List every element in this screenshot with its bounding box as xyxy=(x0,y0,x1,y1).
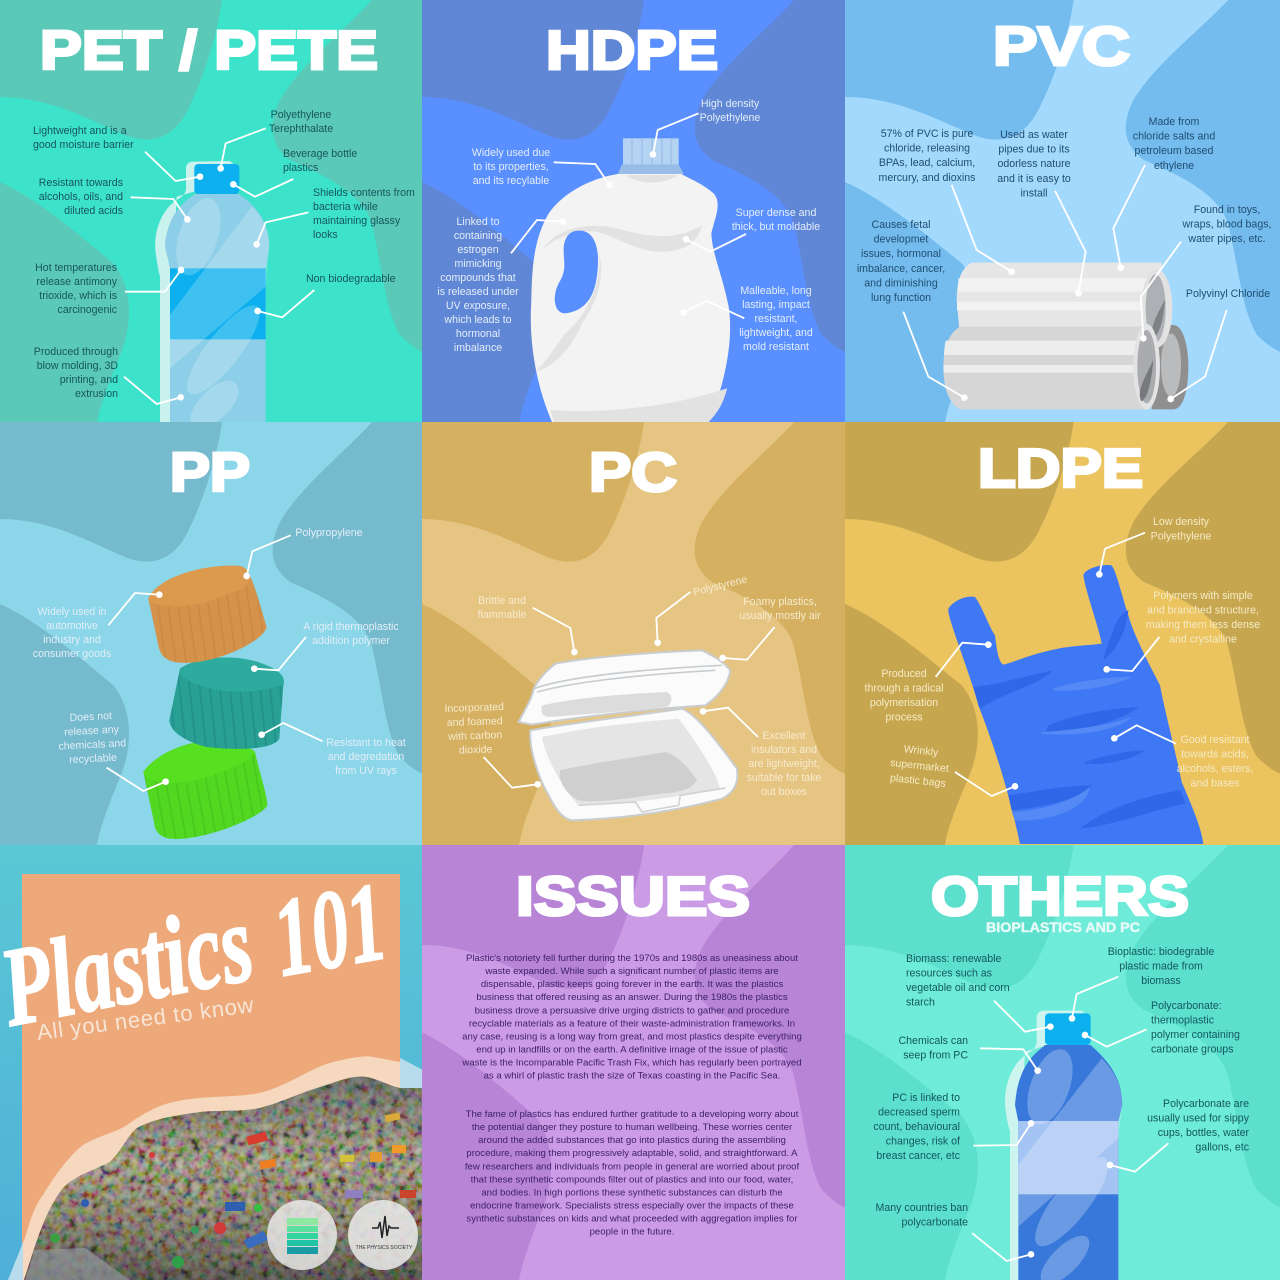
text block: paragraph 1: business drove a persuasive drive urging districts to gather and procedure xyxy=(475,1005,789,1016)
callout: incorporated and foamed: and foamed xyxy=(447,715,503,729)
callout: polycarbonate uses: gallons, etc xyxy=(1195,1142,1250,1154)
callout: produced through radical: polymerisation xyxy=(870,697,938,709)
callout: hot temperatures xyxy=(35,262,184,316)
callout: widely used: to its properties, xyxy=(473,161,549,173)
text block: paragraph 2: around the added substances that go into plastics during the assembling xyxy=(478,1135,786,1146)
callout: excellent insulators xyxy=(700,708,821,798)
callout: does not release: release any xyxy=(64,724,120,738)
callout: foamy plastics: Foamy plastics, xyxy=(743,596,817,608)
callout: fetal development: imbalance, cancer, xyxy=(857,263,945,275)
text block: paragraph 2: people in the future. xyxy=(590,1227,674,1238)
callout: 57% of PVC: mercury, and dioxins xyxy=(879,172,975,184)
title: PVC: PVC xyxy=(993,15,1130,77)
title: ISSUES: ISSUES xyxy=(516,865,750,927)
text block: paragraph 1: any case, reusing is a long way from great, and most plastics despite everything xyxy=(462,1031,802,1042)
callout: good resistant: Good resistant xyxy=(1181,734,1249,746)
landfill photo xyxy=(0,1056,423,1280)
callout: linked to estrogen: UV exposure, xyxy=(446,300,510,312)
callout: does not release xyxy=(57,709,169,791)
text block: paragraph 1: waste is the Incomparable Pacific Trash Fix, which has regularly been portrayed xyxy=(461,1058,802,1069)
icon: stacked pipes xyxy=(943,263,1188,409)
icon: teal cap xyxy=(169,658,284,749)
logo: The Physics Society: THE PHYSICS SOCIETY xyxy=(356,1245,413,1251)
callout: produced through xyxy=(34,346,184,404)
callout: Polyethylene Terephthalate: Polyethylene xyxy=(271,109,331,121)
callout: super dense: Super dense and xyxy=(736,207,816,219)
subtitle: All you need to know xyxy=(35,992,255,1045)
callout: malleable: lightweight, and xyxy=(739,327,813,339)
callout: beverage bottle plastics: plastics xyxy=(283,162,318,174)
callout: fetal development xyxy=(857,219,968,401)
callout: fetal development: lung function xyxy=(871,292,931,304)
callout: biomass: Biomass: renewable xyxy=(906,953,1001,965)
callout: beverage bottle plastics xyxy=(230,148,357,197)
logo: The Physics Society xyxy=(348,1200,418,1270)
callout: fetal development: issues, hormonal xyxy=(861,248,941,260)
callout: produced through radical: Produced xyxy=(881,668,927,680)
callout: wrinkly supermarket: Wrinkly xyxy=(903,743,939,759)
callout: malleable: lasting, impact xyxy=(742,299,810,311)
panel: PVC xyxy=(845,0,1280,423)
icon: blue bottle xyxy=(1005,1011,1122,1280)
callout: health risks: count, behavioural xyxy=(873,1121,960,1133)
callout: moisture barrier xyxy=(33,125,203,181)
text block: paragraph 1: Plastic's notoriety fell further during the 1970s and 1980s as uneasiness about xyxy=(466,953,798,964)
callout: excellent insulators: suitable for take xyxy=(747,772,821,784)
panel: Plastics 101 cover xyxy=(0,845,423,1280)
callout: hot temperatures: Hot temperatures xyxy=(35,262,117,274)
callout: fetal development: Causes fetal xyxy=(872,219,930,231)
text block: paragraph 1: waste expanded. While such a significant number of plastic items are xyxy=(484,966,779,977)
callout: water pipes xyxy=(997,129,1086,297)
callout: high density polyethylene: High density xyxy=(701,98,759,110)
callout: widely used xyxy=(472,147,613,188)
text block: paragraph 2: endocrine framework. Specialists stress especially over the impacts of these xyxy=(470,1200,794,1211)
callout: polymers with simple xyxy=(1103,590,1260,673)
callout: foamy plastics xyxy=(719,596,821,661)
logo: stacked bars badge xyxy=(267,1200,337,1270)
callout: polystyrene: Polystyrene xyxy=(692,573,749,598)
callout: found in toys: Found in toys, xyxy=(1194,204,1260,216)
callout: chemicals seep: Chemicals can xyxy=(899,1035,968,1047)
callout: shields contents: maintaining glassy xyxy=(313,215,401,227)
text block: paragraph 2: few researchers and individuals from people in general are worried about proof xyxy=(465,1161,800,1172)
callout: linked to estrogen: compounds that xyxy=(440,272,516,284)
callout: hot temperatures: release antimony xyxy=(36,276,118,288)
callout: polypropylene: Polypropylene xyxy=(295,527,363,539)
panel: PET / PETE xyxy=(0,0,423,423)
callout: hot temperatures: carcinogenic xyxy=(58,304,118,316)
callout: polyvinyl chloride: Polyvinyl Chloride xyxy=(1186,288,1270,300)
callout: countries ban: polycarbonate xyxy=(901,1216,968,1228)
panel: LDPE xyxy=(845,422,1280,845)
callout: countries ban xyxy=(876,1202,1034,1261)
text block: paragraph 1: dispensable, plastic keeps going forever in the earth. It was the plastics xyxy=(481,979,783,990)
callout: bioplastic: biomass xyxy=(1141,975,1181,987)
orange card xyxy=(22,874,400,1280)
text block: paragraph 2: the potential danger they posture to human wellbeing. These worries center xyxy=(472,1122,793,1133)
callout: does not release: recyclable xyxy=(69,752,117,766)
callout: found in toys: water pipes, etc. xyxy=(1187,233,1266,245)
icon: stacked bottle caps xyxy=(143,566,284,839)
callout: low density polyethylene: Polyethylene xyxy=(1151,530,1211,542)
panel: PP xyxy=(0,422,423,845)
callout: 57% of PVC xyxy=(879,128,1015,275)
callout: widely used: and its recylable xyxy=(473,175,549,187)
callout: polycarbonate definition: carbonate groups xyxy=(1151,1044,1233,1056)
icon: blue plastic bag xyxy=(948,565,1203,844)
text block: paragraph 2: synthetic substances on kids and what proceeded with aggregation implies for xyxy=(466,1214,798,1225)
title: LDPE: LDPE xyxy=(978,437,1143,499)
callout: bioplastic xyxy=(1069,946,1214,1022)
callout: found in toys xyxy=(1140,204,1271,342)
panel: ISSUES xyxy=(422,845,845,1280)
callout: low density polyethylene: Low density xyxy=(1153,516,1209,528)
icon: foam clamshell box xyxy=(519,650,737,820)
callout: health risks: breast cancer, etc xyxy=(876,1150,961,1162)
callout: biomass: starch xyxy=(906,996,935,1008)
callout: 57% of PVC: BPAs, lead, calcium, xyxy=(879,157,975,169)
callout: resistant towards: alcohols, oils, and xyxy=(39,191,123,203)
callout: excellent insulators: are lightweight, xyxy=(748,758,820,770)
callout: excellent insulators: out boxes xyxy=(761,786,807,798)
callout: brittle and flammable: flammable xyxy=(478,609,527,621)
callout: made from: chloride salts and xyxy=(1133,131,1215,143)
text block: paragraph 1: business that offered reusing as an answer. During the 1980s the plastics xyxy=(476,992,788,1003)
callout: does not release: Does not xyxy=(69,710,112,724)
callout: polycarbonate definition: Polycarbonate: xyxy=(1151,1000,1222,1012)
callout: moisture barrier: good moisture barrier xyxy=(33,139,134,151)
callout: resistant towards: Resistant towards xyxy=(39,177,123,189)
callout: made from: Made from xyxy=(1149,116,1199,128)
callout: brittle and flammable xyxy=(478,595,578,655)
callout: produced through: Produced through xyxy=(34,346,118,358)
panel: OTHERS xyxy=(845,845,1280,1280)
callout: good resistant xyxy=(1111,725,1253,790)
callout: linked to estrogen xyxy=(437,216,566,354)
callout: polycarbonate uses: Polycarbonate are xyxy=(1163,1098,1249,1110)
callout: rigid thermoplastic: A rigid thermoplastic xyxy=(303,621,399,633)
callout: high density polyethylene xyxy=(650,98,760,158)
callout: countries ban: Many countries ban xyxy=(876,1202,968,1214)
callout: linked to estrogen: Linked to xyxy=(456,216,500,228)
text block: paragraph 2: that these synthetic compounds filter out of plastics and into our food, water, xyxy=(471,1174,793,1185)
icon: green cap xyxy=(143,741,267,839)
panel: HDPE xyxy=(422,0,845,423)
callout: polycarbonate definition: polymer containing xyxy=(1151,1029,1240,1041)
text block: paragraph 2: and bodies. In high portions these synthetic substances can disturb the xyxy=(481,1187,783,1198)
callout: widely used in: automotive xyxy=(46,620,98,632)
callout: biomass: resources such as xyxy=(906,968,992,980)
callout: found in toys: wraps, blood bags, xyxy=(1182,219,1271,231)
callout: resistant to heat xyxy=(258,723,406,777)
callout: widely used in xyxy=(33,591,163,660)
callout: fetal development: and diminishing xyxy=(864,277,938,289)
text block: paragraph 1: recyclable materials as a feature of their waste-administration frameworks. In xyxy=(469,1018,795,1029)
callout: shields contents: Shields contents from xyxy=(313,187,415,199)
callout: polymers with simple: and crystalline xyxy=(1169,634,1237,646)
callout: foamy plastics: usually mostly air xyxy=(739,610,821,622)
callout: super dense xyxy=(683,207,820,252)
callout: incorporated and foamed: with carbon xyxy=(447,729,503,743)
callout: made from xyxy=(1113,116,1215,271)
callout: water pipes: Used as water xyxy=(1000,129,1068,141)
callout: bioplastic: Bioplastic: biodegrable xyxy=(1108,946,1214,958)
callout: linked to estrogen: containing xyxy=(454,230,502,242)
callout: resistant to heat: Resistant to heat xyxy=(326,737,406,749)
callout: biomass xyxy=(906,953,1054,1032)
text block: paragraph 2: procedure, making them progressively adaptable, solid, and straightforward. A xyxy=(466,1148,798,1159)
callout: resistant towards xyxy=(39,177,191,223)
callout: bioplastic: plastic made from xyxy=(1119,960,1203,972)
callout: shields contents xyxy=(253,187,415,248)
callout: malleable: Malleable, long xyxy=(740,285,812,297)
callout: excellent insulators: insulators and xyxy=(751,744,817,756)
callout: polycarbonate definition xyxy=(1082,1000,1240,1056)
callout: widely used in: consumer goods xyxy=(33,648,111,660)
callout: shields contents: bacteria while xyxy=(313,201,378,213)
callout: health risks xyxy=(873,1092,1034,1162)
callout: fetal development: developmet xyxy=(874,234,928,246)
callout: produced through: printing, and xyxy=(60,374,118,386)
icon: clear PET bottle xyxy=(155,161,270,422)
callout: linked to estrogen: estrogen xyxy=(457,244,499,256)
title: OTHERS: OTHERS xyxy=(931,865,1189,927)
callout: brittle and flammable: Brittle and xyxy=(478,595,526,607)
callout: does not release: chemicals and xyxy=(58,737,126,753)
callout: 57% of PVC: chloride, releasing xyxy=(884,143,970,155)
callout: produced through: blow molding, 3D xyxy=(37,360,118,372)
panel: PC xyxy=(422,422,845,845)
callout: made from: petroleum based xyxy=(1135,145,1214,157)
callout: moisture barrier: Lightweight and is a xyxy=(33,125,127,137)
icon: white jug xyxy=(531,138,730,422)
callout: Polyethylene Terephthalate xyxy=(217,109,333,172)
callout: produced through radical: process xyxy=(885,712,923,724)
callout: polyvinyl chloride xyxy=(1167,288,1270,402)
callout: health risks: changes, risk of xyxy=(886,1136,960,1148)
callout: polymers with simple: making them less dense xyxy=(1146,619,1260,631)
callout: super dense: thick, but moldable xyxy=(732,221,820,233)
callout: water pipes: odorless nature xyxy=(997,158,1071,170)
callout: polycarbonate definition: thermoplastic xyxy=(1151,1014,1215,1026)
callout: polypropylene xyxy=(243,527,363,579)
callout: 57% of PVC: 57% of PVC is pure xyxy=(881,128,973,140)
callout: incorporated and foamed xyxy=(444,701,541,788)
callout: beverage bottle plastics: Beverage bottle xyxy=(283,148,357,160)
callout: incorporated and foamed: dioxide xyxy=(459,743,493,757)
title: 101: 101 xyxy=(265,859,395,1001)
callout: chemicals seep xyxy=(899,1035,1041,1074)
callout: biomass: vegetable oil and corn xyxy=(906,982,1010,994)
callout: good resistant: and bases xyxy=(1191,778,1239,790)
callout: produced through radical: through a radical xyxy=(865,682,943,694)
callout: water pipes: install xyxy=(1020,187,1048,199)
callout: resistant to heat: from UV rays xyxy=(335,765,397,777)
callout: polymers with simple: and branched structure, xyxy=(1147,604,1259,616)
callout: linked to estrogen: mimicking xyxy=(454,258,502,270)
callout: polymers with simple: Polymers with simple xyxy=(1153,590,1253,602)
callout: malleable: resistant, xyxy=(755,313,797,325)
callout: malleable xyxy=(680,285,813,353)
icon: orange cap xyxy=(148,566,267,663)
callout: produced through radical xyxy=(865,641,992,724)
title: PC: PC xyxy=(589,441,677,503)
callout: excellent insulators: Excellent xyxy=(762,730,806,742)
callout: resistant to heat: and degredation xyxy=(328,751,404,763)
callout: linked to estrogen: imbalance xyxy=(454,342,502,354)
callout: polystyrene xyxy=(654,573,749,646)
callout: non biodegradable: Non biodegradable xyxy=(306,273,396,285)
callout: produced through: extrusion xyxy=(75,388,118,400)
callout: good resistant: towards acids, xyxy=(1181,748,1249,760)
callout: linked to estrogen: is released under xyxy=(437,286,519,298)
callout: chemicals seep: seep from PC xyxy=(903,1050,968,1062)
callout: good resistant: alcohols, esters, xyxy=(1177,763,1253,775)
text block: paragraph 1: end up in landfills or on the earth. A definitive image of the issue of plastic xyxy=(476,1044,788,1055)
callout: rigid thermoplastic: addition polymer xyxy=(312,635,390,647)
title: HDPE: HDPE xyxy=(546,19,718,81)
callout: made from: ethylene xyxy=(1154,160,1194,172)
callout: widely used: Widely used due xyxy=(472,147,550,159)
subtitle: bioplastics and PC: BIOPLASTICS AND PC xyxy=(986,919,1140,935)
callout: low density polyethylene xyxy=(1096,516,1211,578)
callout: non biodegradable xyxy=(254,273,396,317)
callout: rigid thermoplastic xyxy=(251,621,399,672)
text block: paragraph 1: as a whirl of plastic trash the size of Texas coasting in the Pacific Sea. xyxy=(484,1071,780,1082)
callout: resistant towards: diluted acids xyxy=(64,205,123,217)
callout: polycarbonate uses xyxy=(1107,1098,1250,1172)
callout: wrinkly supermarket xyxy=(888,742,1018,796)
callout: polycarbonate uses: usually used for sippy xyxy=(1147,1112,1250,1124)
title: PET / PETE: PET / PETE xyxy=(40,19,378,81)
text block: paragraph 2: The fame of plastics has endured further gratitude to a developing worry about xyxy=(466,1109,798,1120)
callout: health risks: decreased sperm xyxy=(878,1106,960,1118)
callout: wrinkly supermarket: supermarket xyxy=(890,757,949,775)
callout: wrinkly supermarket: plastic bags xyxy=(889,772,946,790)
callout: linked to estrogen: which leads to xyxy=(443,314,512,326)
callout: widely used in: Widely used in xyxy=(38,606,106,618)
callout: health risks: PC is linked to xyxy=(892,1092,960,1104)
title: PP: PP xyxy=(170,441,250,503)
callout: polycarbonate uses: cups, bottles, water xyxy=(1158,1127,1249,1139)
callout: water pipes: pipes due to its xyxy=(998,144,1070,156)
callout: linked to estrogen: hormonal xyxy=(456,328,500,340)
callout: high density polyethylene: Polyethylene xyxy=(700,112,760,124)
callout: incorporated and foamed: Incorporated xyxy=(444,701,504,715)
callout: Polyethylene Terephthalate: Terephthalate xyxy=(269,123,333,135)
callout: hot temperatures: trioxide, which is xyxy=(39,290,117,302)
callout: water pipes: and it is easy to xyxy=(997,173,1071,185)
callout: shields contents: looks xyxy=(313,229,338,241)
title: Plastics: Plastics xyxy=(0,881,262,1051)
callout: widely used in: industry and xyxy=(43,634,101,646)
callout: malleable: mold resistant xyxy=(743,341,809,353)
